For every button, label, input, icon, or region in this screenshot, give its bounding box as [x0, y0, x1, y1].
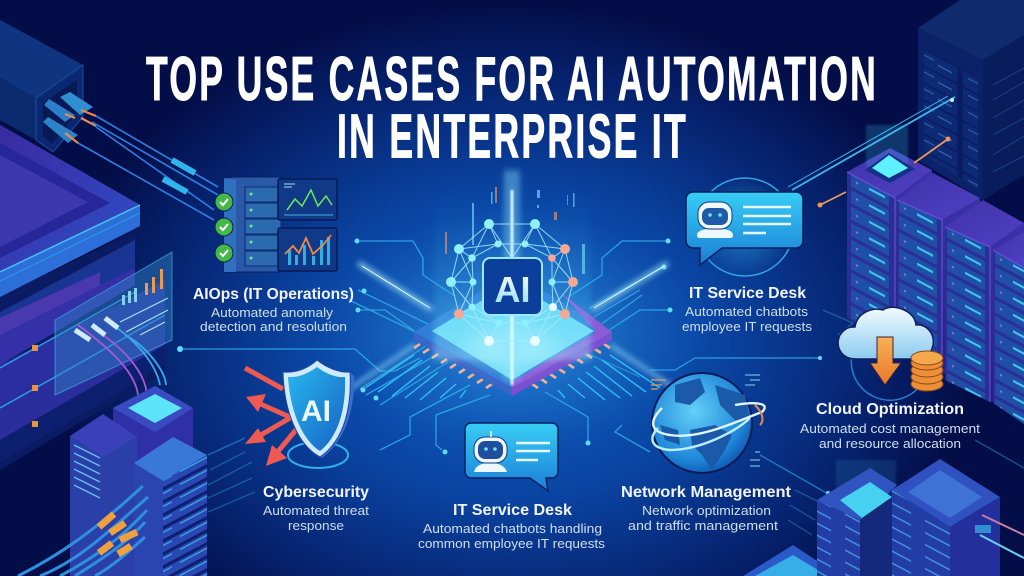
- rack link lines: [788, 96, 955, 208]
- glow beams: [345, 263, 680, 392]
- top-left dark server: [0, 20, 96, 152]
- text: Cloud Optimization: [816, 401, 964, 418]
- text: [682, 285, 812, 334]
- title: [146, 44, 878, 172]
- connector tips: [65, 110, 96, 143]
- text: Automated cost management: [800, 422, 981, 436]
- title: IN ENTERPRISE IT: [337, 102, 688, 172]
- lower-left server towers: [18, 386, 207, 576]
- icon: globe: [651, 373, 765, 473]
- glowing chip on tower: [865, 125, 915, 183]
- text: Network optimization: [642, 504, 771, 518]
- stack top plate: [0, 125, 140, 297]
- AIOps use case: [193, 177, 354, 334]
- text: [263, 484, 370, 533]
- icon: chat bubble robot: [686, 192, 803, 265]
- icon: server with charts: [215, 177, 337, 272]
- text: Automated threat: [263, 504, 370, 518]
- data particles: [472, 190, 585, 274]
- text: detection and resolution: [200, 320, 347, 334]
- icon: AI shield: AI: [301, 395, 331, 428]
- text: IT Service Desk: [689, 285, 806, 302]
- text: employee IT requests: [682, 320, 812, 334]
- text: AIOps (IT Operations): [193, 286, 354, 303]
- right dark rack: [918, 0, 1024, 200]
- status checks: [215, 193, 233, 262]
- orange cable connectors: [99, 514, 137, 554]
- blue cable bundle: [18, 486, 148, 576]
- icon: red threat arrows: [245, 368, 300, 466]
- circuit traces: [180, 241, 1024, 535]
- icon: coins: [911, 351, 943, 391]
- bottom-right servers: [743, 459, 1024, 576]
- IT Service Desk (top) use case: [682, 178, 812, 334]
- text: Automated anomaly: [211, 306, 334, 320]
- text: [193, 286, 354, 334]
- light column: [434, 190, 591, 360]
- chip pins and traces: [365, 355, 660, 400]
- text: common employee IT requests: [418, 537, 605, 551]
- text: Automated chatbots: [685, 305, 808, 319]
- icon: cloud: [838, 307, 933, 359]
- text: [621, 484, 792, 533]
- AI badge: [483, 258, 542, 315]
- icon: download arrow: [870, 337, 901, 385]
- Cybersecurity use case: [245, 360, 370, 533]
- text: Network Management: [621, 484, 792, 501]
- Network Management use case: [621, 373, 792, 533]
- text: Cybersecurity: [263, 484, 369, 501]
- left server stack: [0, 125, 172, 470]
- text: and resource allocation: [819, 437, 961, 451]
- chip body: [414, 272, 612, 396]
- neural network: [446, 219, 578, 346]
- text: response: [288, 519, 344, 533]
- text: Automated chatbots handling: [423, 522, 602, 536]
- AI badge: AI: [494, 269, 530, 310]
- translucent data panel: [55, 252, 172, 395]
- text: [418, 502, 605, 551]
- right purple server towers: [847, 125, 1024, 424]
- Cloud Optimization use case: [800, 307, 981, 451]
- central AI chip: [345, 170, 680, 400]
- text: and traffic management: [628, 519, 779, 533]
- fibre cables to AIOps: [78, 116, 218, 220]
- text: [800, 401, 981, 451]
- icon: AI shield: [283, 360, 354, 458]
- text: IT Service Desk: [453, 502, 572, 519]
- icon: chat bubble robot: [465, 423, 558, 491]
- network patch cables: [75, 318, 166, 395]
- IT Service Desk (bottom) use case: [418, 423, 605, 551]
- circuit trace nodes: [177, 238, 830, 495]
- front tower: [134, 437, 207, 576]
